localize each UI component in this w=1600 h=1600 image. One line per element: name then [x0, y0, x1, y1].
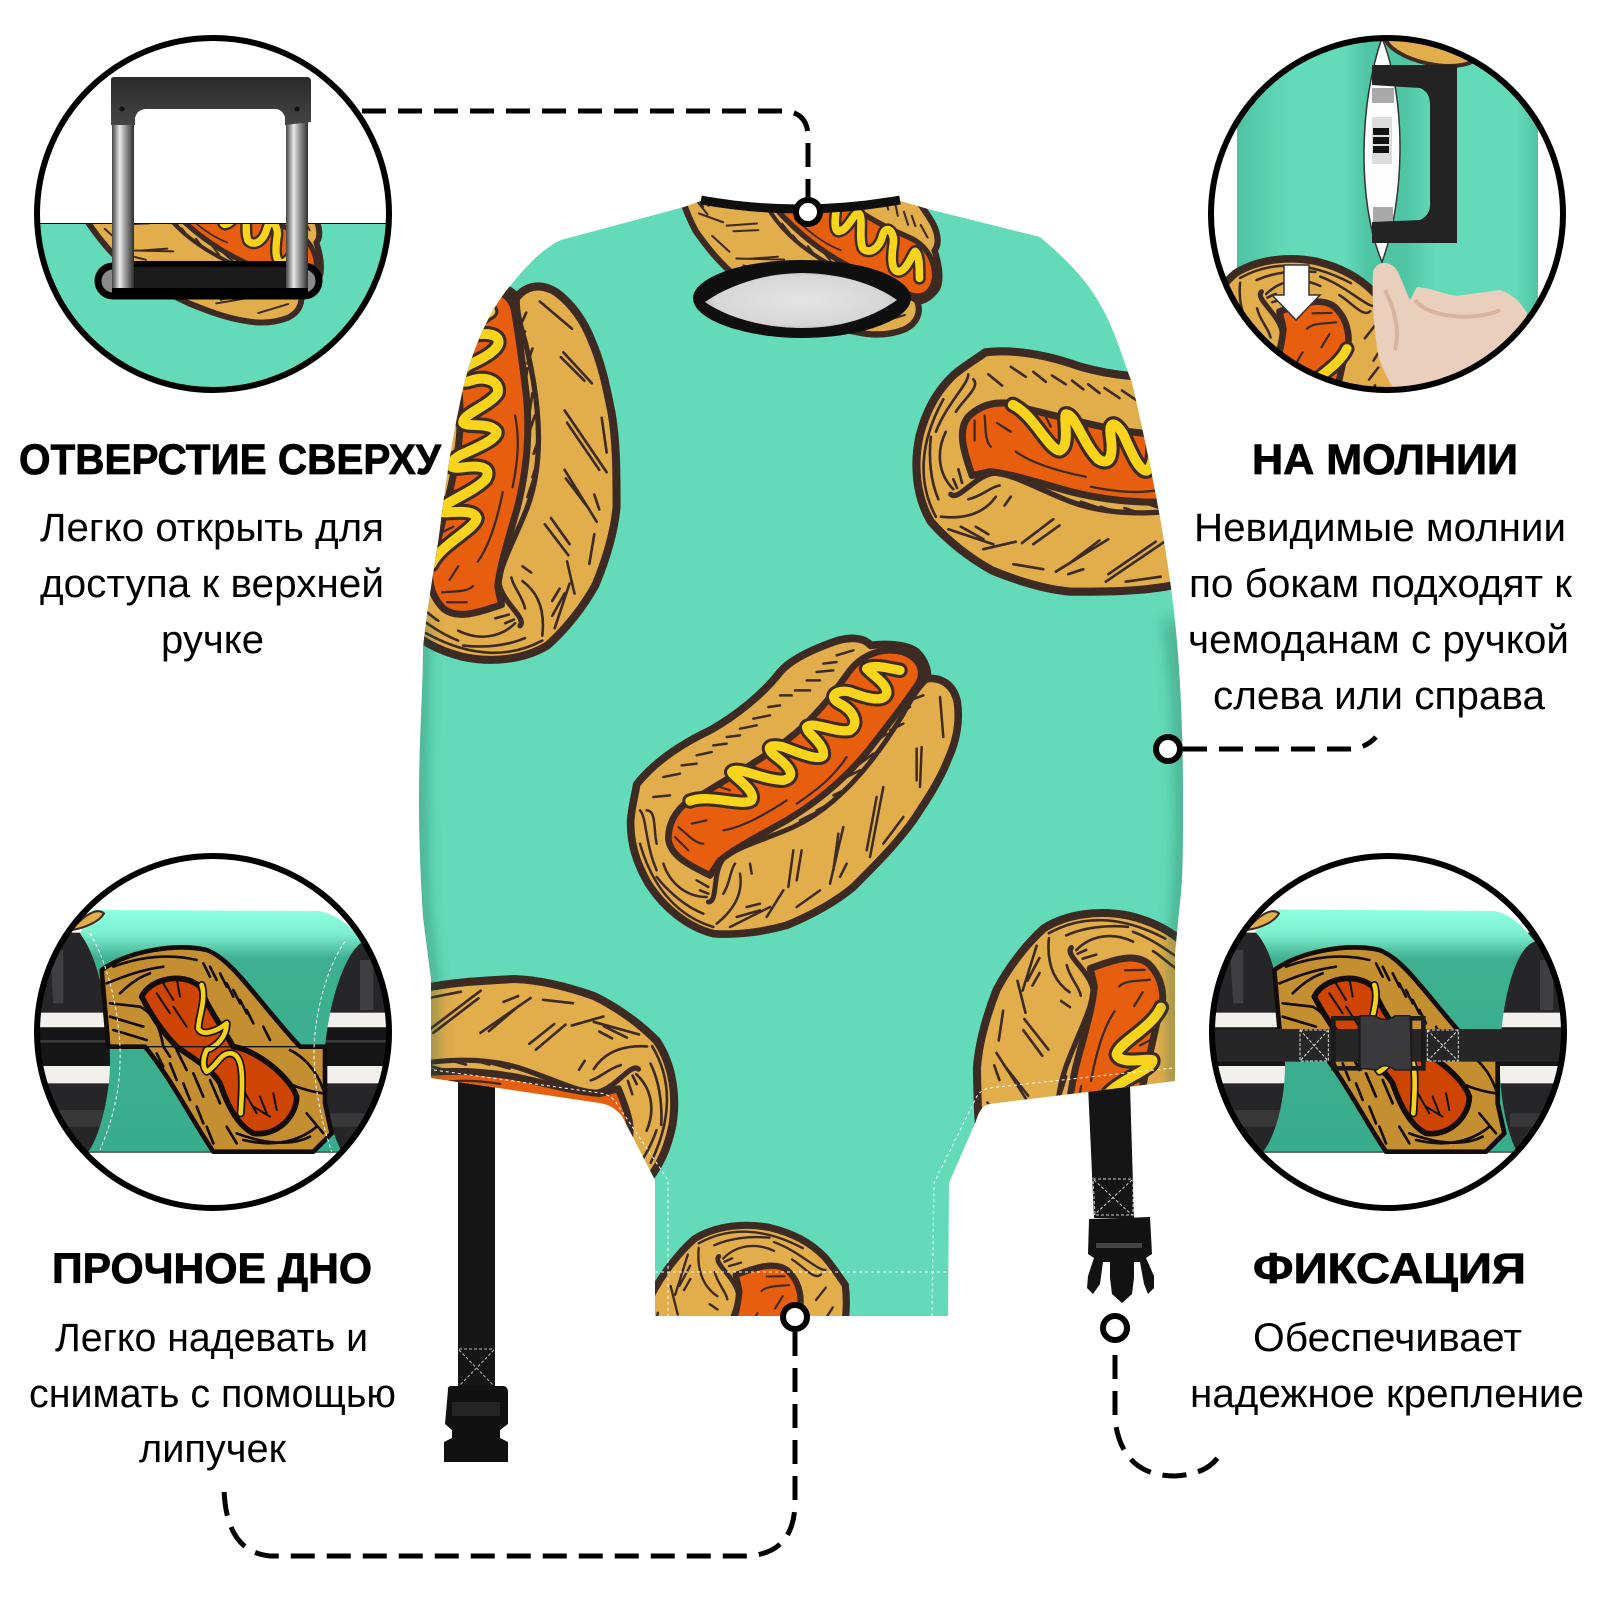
marker: bottom: [783, 1305, 807, 1329]
text block: zipper: [1188, 436, 1573, 718]
hot dog: top: [682, 201, 942, 338]
text block: zipper: чемоданам с ручкой: [1188, 618, 1569, 662]
text block: strong bottom: ПРОЧНОЕ ДНО: [52, 1245, 372, 1293]
suitcase cover with hot dog pattern: [419, 201, 1183, 1316]
hot dog: left: [423, 282, 621, 664]
hot dog: right: [912, 347, 1172, 596]
connector: zipper: [1183, 737, 1376, 749]
marker: top opening: [796, 200, 820, 224]
text block: zipper: НА МОЛНИИ: [1252, 436, 1518, 484]
connector: bottom: [224, 1332, 795, 1556]
right strap with buckle: [1087, 1085, 1154, 1303]
hot dog: bottom right: [972, 909, 1177, 1124]
circle: top handle: [30, 30, 400, 404]
left strap with buckle: [444, 1080, 508, 1462]
text block: strong bottom: [29, 1245, 396, 1471]
circle: zipper: [1208, 35, 1566, 393]
text block: top opening: ОТВЕРСТИЕ СВЕРХУ: [19, 436, 442, 484]
top opening in cover: [693, 260, 911, 338]
circle: fastening strap: [1203, 850, 1587, 1220]
marker: zipper: [1156, 737, 1180, 761]
text block: top opening: ручке: [161, 618, 264, 662]
hot dog: bottom centre: [655, 1222, 850, 1316]
text block: strong bottom: Легко надевать и: [55, 1316, 368, 1360]
text block: top opening: Легко открыть для: [40, 506, 384, 550]
hot dog: centre: [631, 638, 958, 934]
text block: top opening: [19, 436, 442, 662]
text block: zipper: слева или справа: [1213, 674, 1545, 718]
marker: fastening: [1103, 1316, 1127, 1340]
text block: fastening: надежное крепление: [1190, 1372, 1584, 1416]
connector: top handle to opening: [362, 111, 808, 198]
text block: fastening: ФИКСАЦИЯ: [1253, 1245, 1526, 1293]
text block: fastening: Обеспечивает: [1253, 1316, 1522, 1360]
text block: fastening: [1190, 1245, 1584, 1416]
text block: strong bottom: снимать с помощью: [29, 1372, 396, 1416]
circle: strong bottom: [23, 850, 407, 1220]
connector: fastening: [1115, 1355, 1222, 1476]
arrow down: [1272, 265, 1320, 320]
strap and buckle: [1203, 1029, 1577, 1062]
text block: zipper: по бокам подходят к: [1189, 562, 1573, 606]
text block: top opening: доступа к верхней: [40, 562, 384, 606]
text block: zipper: Невидимые молнии: [1194, 506, 1566, 550]
text block: strong bottom: липучек: [139, 1427, 287, 1471]
collar of cover: [701, 200, 900, 209]
hot dog: bottom left: [431, 975, 678, 1178]
